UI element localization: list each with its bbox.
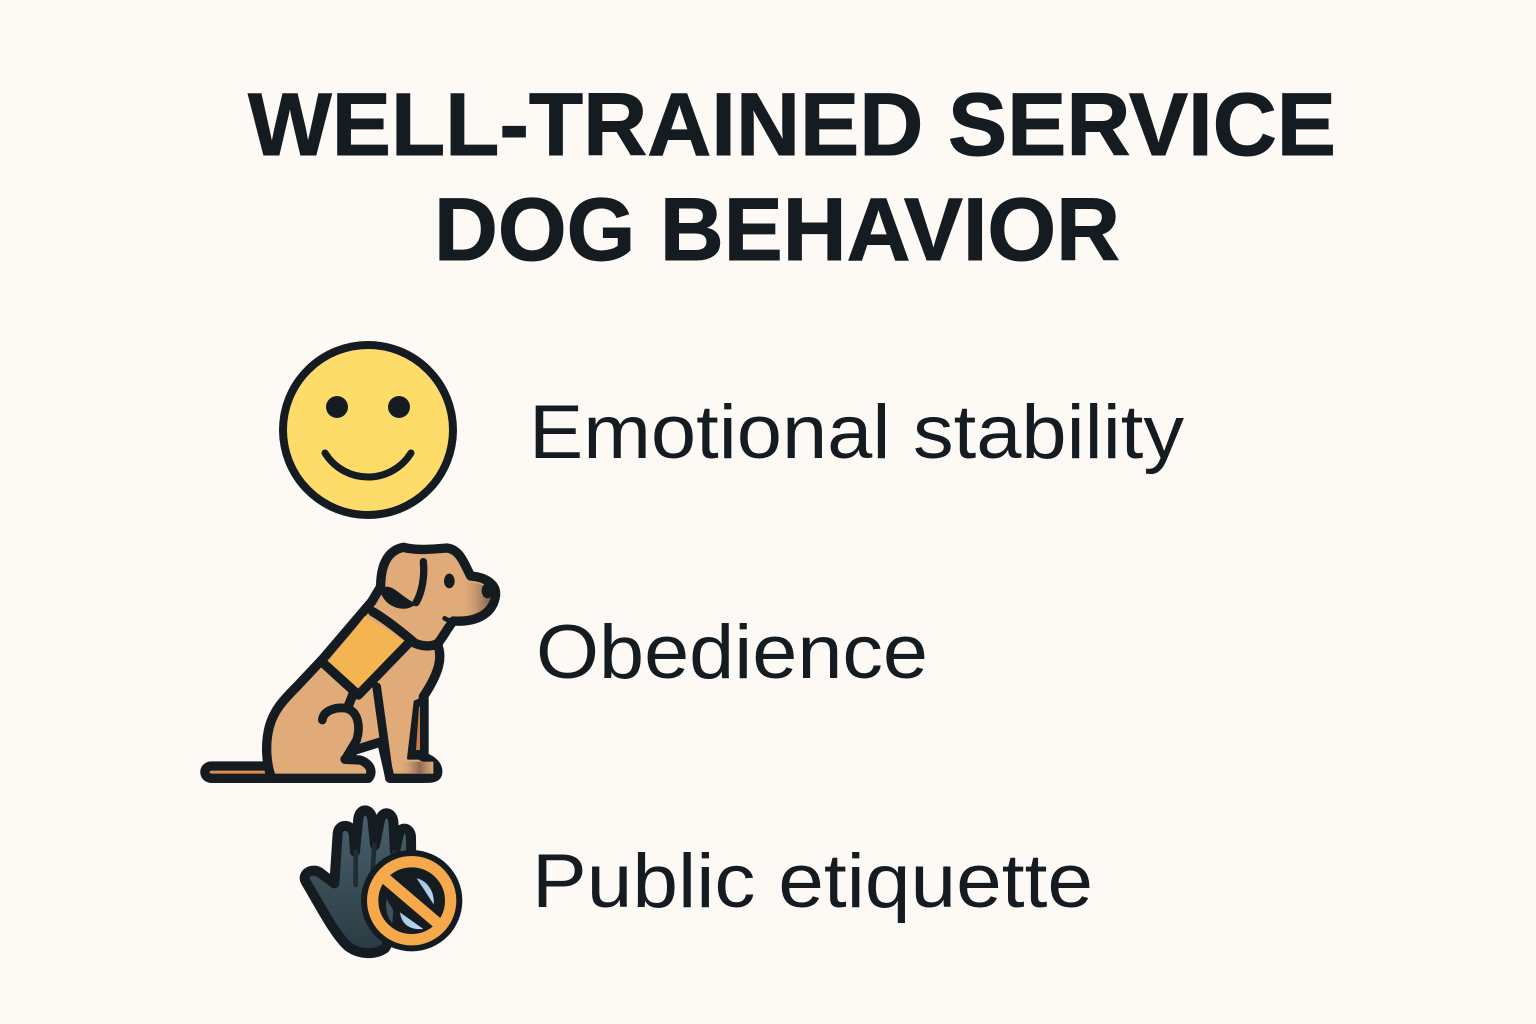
- ear: [416, 562, 424, 603]
- dog tail: [205, 766, 273, 778]
- blue drop pieces: [400, 878, 434, 929]
- dog vest: [328, 616, 405, 690]
- vest straps: [322, 612, 438, 708]
- mouth: [445, 618, 470, 622]
- eye: [444, 574, 455, 588]
- label: obedience: Obedience: [536, 610, 928, 695]
- hand: [305, 810, 412, 953]
- icon: smiley face: [283, 345, 453, 515]
- icon: service dog with vest: [205, 547, 496, 778]
- prohibition sign: [361, 850, 462, 951]
- title: WELL-TRAINED SERVICE: [248, 74, 1336, 174]
- front leg lines: [377, 687, 389, 778]
- icon: hand with prohibition sign: [305, 810, 462, 953]
- title: DOG BEHAVIOR: [434, 179, 1120, 279]
- title: [248, 74, 1336, 279]
- finger shadows: [356, 845, 394, 885]
- paw shading: [398, 762, 433, 774]
- hind leg: [322, 708, 358, 757]
- label: emotional stability: Emotional stability: [529, 390, 1184, 475]
- label: public etiquette: Public etiquette: [532, 839, 1093, 924]
- nose: [482, 583, 493, 598]
- dog body: [267, 547, 496, 778]
- muzzle shading: [460, 582, 490, 616]
- prohibition bar: [385, 878, 439, 924]
